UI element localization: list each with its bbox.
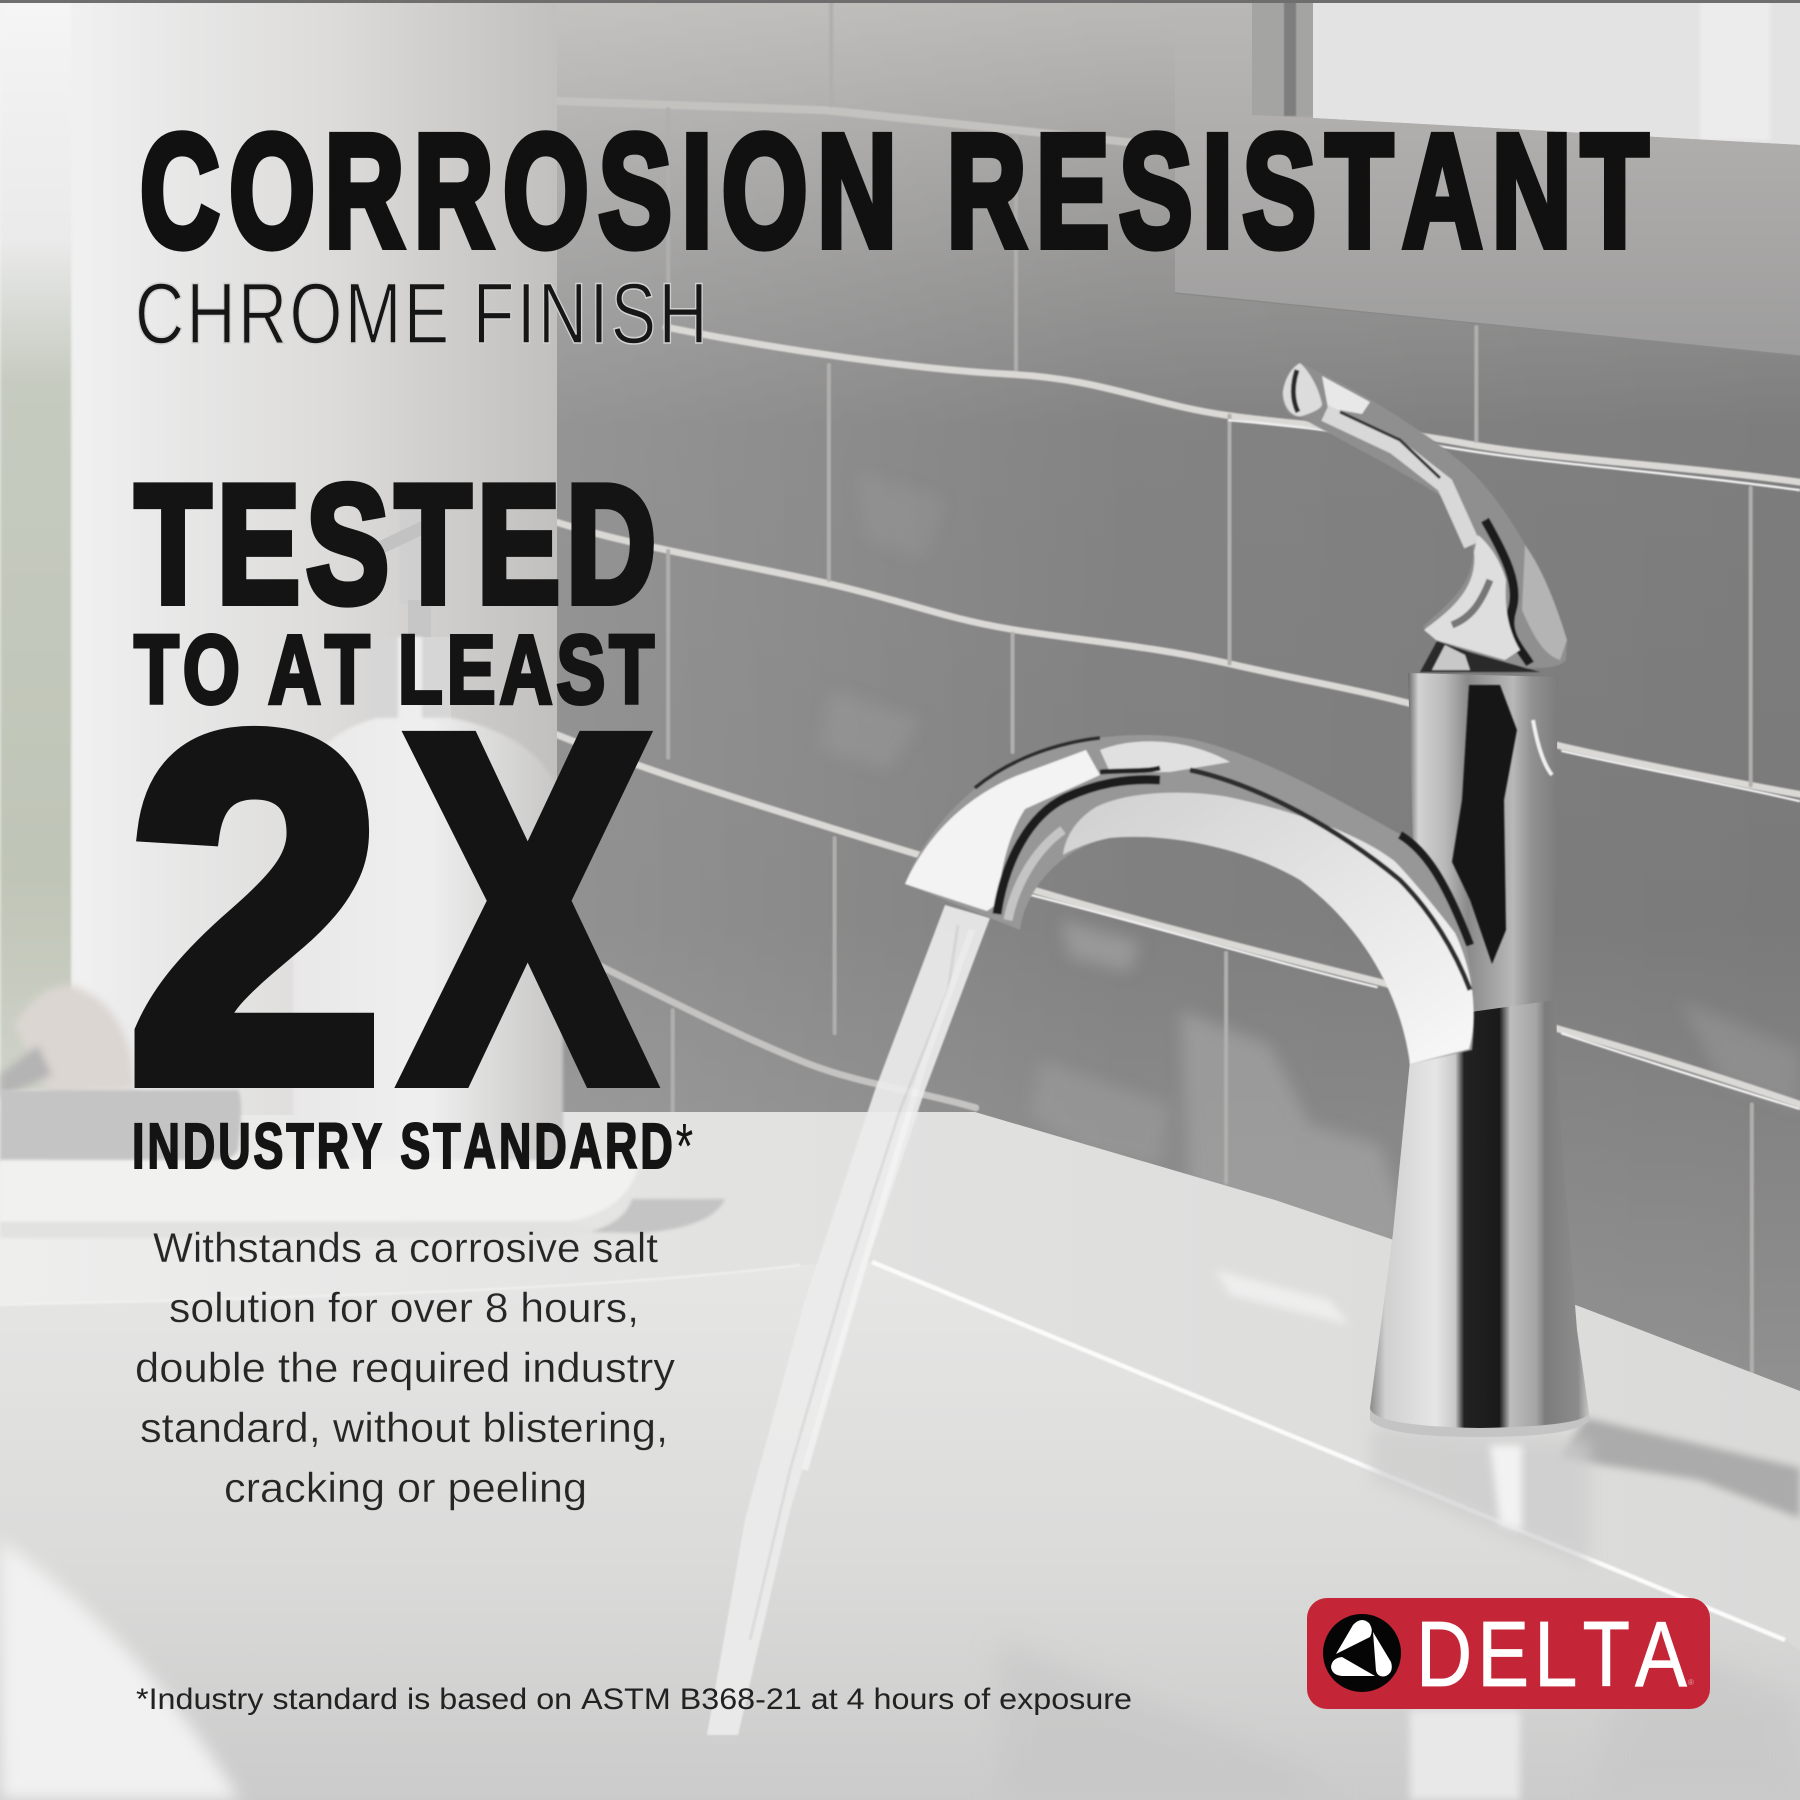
faucet handle <box>1282 363 1567 672</box>
spout tip white <box>905 750 1100 911</box>
tile wall <box>555 0 1800 1420</box>
footnote: *Industry standard is based on ASTM B368-21 at 4 hours of exposure <box>136 1683 1132 1716</box>
claim: tested: TESTED <box>135 450 662 638</box>
sink rim highlight <box>872 1262 1785 1640</box>
sink bottom tone <box>0 1540 240 1800</box>
description paragraph: standard, without blistering, <box>140 1404 668 1451</box>
description paragraph: solution for over 8 hours, <box>169 1284 639 1331</box>
tile grout lines <box>557 0 1800 1372</box>
column lower flare <box>1370 1000 1589 1430</box>
left pale wall <box>0 0 557 1115</box>
window <box>0 0 72 1090</box>
description paragraph: double the required industry <box>135 1344 675 1391</box>
water stream <box>707 905 990 1735</box>
grout sparkle highlights <box>1010 420 1800 1109</box>
mirror <box>1175 0 1800 356</box>
claim: 2X: 2 <box>128 634 383 1182</box>
subtitle: chrome finish: CHROME FINISH <box>135 266 710 362</box>
faucet <box>905 363 1590 1437</box>
shadow and reflection under faucet <box>1372 1418 1800 1800</box>
claim: to at least: TO AT LEAST <box>134 615 658 724</box>
claim: 2X <box>128 634 652 1182</box>
counter top <box>0 1112 1800 1800</box>
sink bowl <box>0 1262 1800 1800</box>
delta logo <box>1307 1598 1710 1709</box>
spout top highlight <box>1100 741 1230 772</box>
soap dispenser <box>293 504 563 1165</box>
glass cup <box>0 1090 241 1162</box>
spout underside light <box>1063 793 1474 1064</box>
description paragraph: cracking or peeling <box>224 1464 587 1511</box>
soap tray <box>0 1160 640 1222</box>
column dark reflection <box>1452 685 1517 964</box>
faucet column <box>1408 673 1558 1020</box>
description paragraph <box>135 1224 675 1511</box>
top edge line <box>0 0 1800 3</box>
registered mark: ® <box>1688 1678 1694 1687</box>
makeup brush <box>0 985 135 1098</box>
logo emblem <box>1323 1614 1401 1692</box>
spout dark band <box>997 780 1160 914</box>
claim: 2X: X <box>405 634 652 1182</box>
column bright streak <box>1520 720 1554 1108</box>
faucet spout <box>905 735 1474 1064</box>
claim: industry standard: INDUSTRY STANDARD* <box>132 1110 696 1182</box>
description paragraph: Withstands a corrosive salt <box>153 1224 658 1271</box>
logo wordmark: DELTA <box>1416 1602 1692 1706</box>
window frame strip <box>72 0 92 1090</box>
